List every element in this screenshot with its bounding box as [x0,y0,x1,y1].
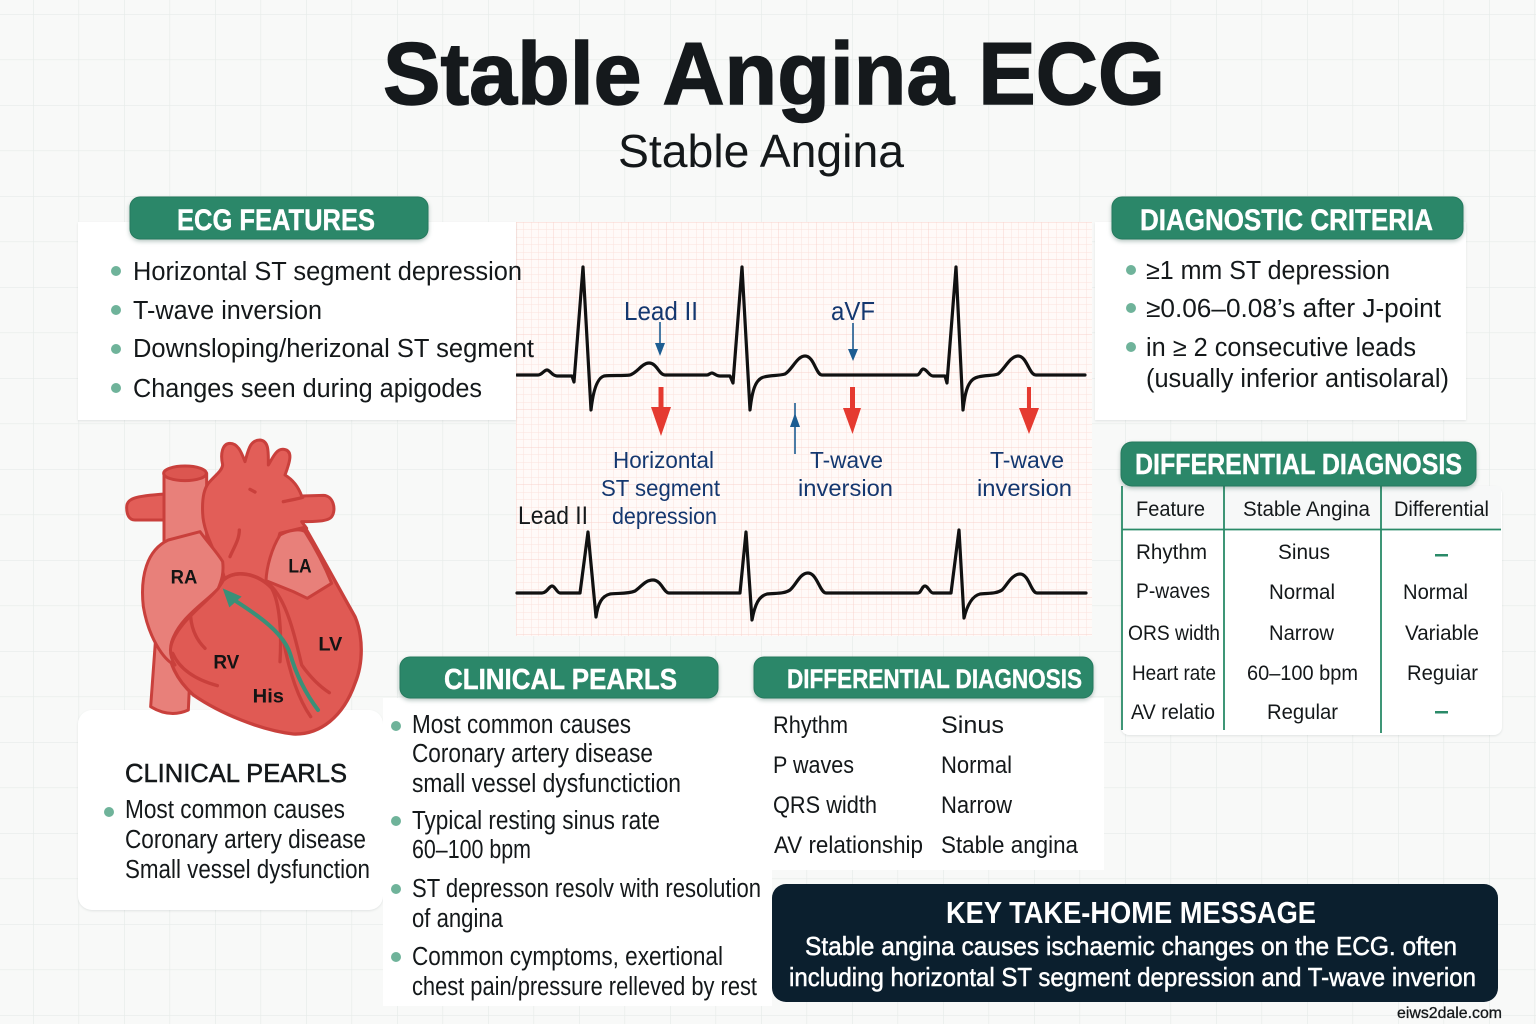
table rows: Reguiar [1407,661,1478,685]
list: clinical pearls centre: Most common causes [412,711,631,739]
list: differential diagnosis lower: Narrow [941,792,1013,819]
ventricles body [170,527,361,734]
list: differential diagnosis lower: Rhythm [773,712,848,739]
list: ECG features: Downsloping/herizonal ST segment [133,335,534,363]
label: Lead II blue: Lead II [624,296,698,326]
table header [1136,497,1489,521]
left atrium [266,530,332,598]
list: clinical pearls centre: chest pain/pressure relleved by rest [412,973,757,1001]
table header: Stable Angina [1243,497,1370,521]
arrow: red ST [651,387,671,436]
list: differential diagnosis lower: QRS width [773,792,877,819]
heading: diagnostic criteria: DIAGNOSTIC CRITERIA [1140,204,1433,237]
list: clinical pearls centre: 60–100 bpm [412,836,531,864]
list: diagnostic criteria: (usually inferior antisolaral) [1146,365,1449,393]
callout: key take-home message: KEY TAKE-HOME MESSAGE [946,895,1316,930]
heart labels: LV [318,635,342,656]
heading: differential diagnosis lower [754,657,1093,698]
label: ST depression: Horizontal [613,447,714,473]
panel: clinical pearls left [78,710,383,910]
aorta and arch [203,440,334,587]
list: clinical pearls left: Coronary artery disease [125,826,366,854]
table rows: ORS width [1128,621,1220,645]
list: differential diagnosis lower [773,712,1079,859]
list: differential diagnosis lower: P waves [773,752,854,779]
heading: differential diagnosis table [1121,442,1476,486]
ECG trace: upper [517,267,1085,410]
list: differential diagnosis lower: AV relationship [774,832,923,859]
label: Lead II black: Lead II [518,502,588,530]
right atrium [143,532,223,665]
label: T-wave inversion centre [798,447,893,501]
panel: differential diagnosis lower [754,657,1104,870]
heading: differential diagnosis table: DIFFERENTIAL DIAGNOSIS [1135,449,1462,481]
table rows: P-waves [1136,579,1210,603]
callout: key take-home message: Stable angina causes ischaemic changes on the ECG. often [805,931,1457,961]
list: clinical pearls centre: Typical resting sinus rate [412,807,660,835]
ECG trace: lower [517,530,1086,620]
heading: differential diagnosis lower: DIFFERENTIAL DIAGNOSIS [787,664,1082,694]
table header: Differential [1394,497,1489,521]
list: clinical pearls centre [391,711,761,1001]
list: ECG features: Changes seen during apigodes [133,375,482,403]
heart labels: LA [288,556,312,577]
list: clinical pearls left: Most common causes [125,796,345,824]
list: diagnostic criteria [1126,257,1449,393]
heart labels: RV [213,652,239,673]
callout: key take-home message: including horizontal ST segment depression and T-wave inverion [789,962,1476,992]
label: T-wave inversion right: inversion [977,475,1072,501]
arrow: blue lead II [655,322,665,356]
heading: ECG features: ECG FEATURES [177,204,375,237]
table rows: Narrow [1269,621,1334,645]
source credit: eiws2dale.com [1397,1005,1502,1022]
list: clinical pearls centre: small vessel dysfunctiction [412,770,681,798]
list: diagnostic criteria: in ≥ 2 consecutive leads [1146,334,1416,362]
heart labels: His [253,687,284,708]
table rows [1128,540,1479,724]
list: clinical pearls centre: of angina [412,905,504,933]
label: T-wave inversion centre: T-wave [810,447,883,473]
panel: clinical pearls centre [383,657,772,1006]
heart labels [171,556,342,708]
table rows: Regular [1267,700,1338,724]
panel: ECG features [78,197,534,420]
list: differential diagnosis lower: Normal [941,752,1012,779]
title: Stable Angina ECG [383,24,1165,123]
table rows: Normal [1269,580,1335,604]
inferior vena cava [151,633,190,713]
subtitle: Stable Angina [618,125,904,177]
heading: diagnostic criteria [1112,197,1463,239]
panel: differential diagnosis table [1121,442,1502,735]
table rows: Variable [1405,621,1479,645]
list: clinical pearls left [104,796,370,884]
arrow: blue aVF [848,323,858,361]
list: clinical pearls centre: Common cymptoms, exertional [412,943,723,971]
table rows: Sinus [1278,540,1330,564]
label: aVF: aVF [831,296,875,326]
heart chamber lines [173,489,329,717]
label: ST depression: depression [612,503,717,529]
label: ST depression [601,447,720,529]
label: T-wave inversion centre: inversion [798,475,893,501]
icon: heart anatomy [127,440,361,734]
conduction arrow [223,588,318,710]
heading: clinical pearls centre [400,657,718,698]
list: clinical pearls centre: ST depresson resolv with resolution [412,875,761,903]
heart labels: RA [171,567,197,588]
panel: ECG chart [516,222,1092,636]
callout: key take-home message [772,884,1498,1002]
arrow: blue up [790,403,800,454]
arrow: red T-wave 2 [1019,387,1039,434]
table rows: Heart rate [1132,661,1216,685]
list: clinical pearls left: Small vessel dysfunction [125,856,370,884]
label: T-wave inversion right: T-wave [990,447,1064,473]
table rows: 60–100 bpm [1247,661,1358,685]
list: clinical pearls centre: Coronary artery disease [412,740,653,768]
superior vena cava [127,466,207,543]
list: ECG features: T-wave inversion [133,297,322,325]
table rows: Normal [1403,580,1468,604]
list: diagnostic criteria: ≥0.06–0.08’s after J-point [1146,295,1441,323]
list: ECG features: Horizontal ST segment depression [133,258,522,286]
table rows: AV relatio [1131,700,1215,724]
heading: clinical pearls centre: CLINICAL PEARLS [444,664,677,696]
list: differential diagnosis lower: Sinus [941,712,1004,739]
table rows: Rhythm [1136,540,1207,564]
heading: clinical pearls left: CLINICAL PEARLS [125,758,347,788]
arrow: red T-wave 1 [843,387,861,434]
panel: diagnostic criteria [1095,197,1466,420]
list: ECG features [111,258,534,403]
heading: ECG features [130,197,428,239]
label: ST depression: ST segment [601,475,720,501]
table header: Feature [1136,497,1205,521]
label: T-wave inversion right [977,447,1072,501]
list: differential diagnosis lower: Stable angina [941,832,1079,859]
list: diagnostic criteria: ≥1 mm ST depression [1146,257,1390,285]
